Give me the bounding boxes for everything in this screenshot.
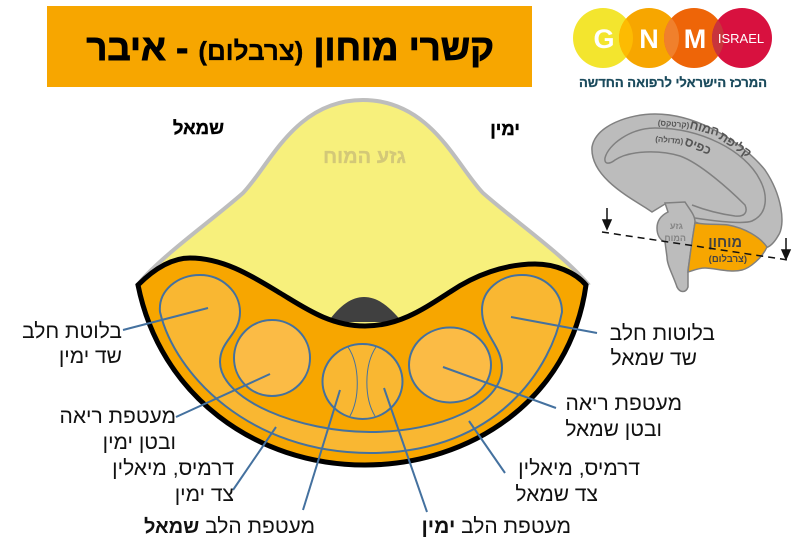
label: pericardium left: מעטפת הלב שמאל: [144, 515, 315, 538]
cerebellum label: מוחון: [708, 235, 742, 251]
label: dermis right: [112, 457, 234, 506]
label: left lung and belly pleura: ובטן שמאל: [565, 418, 662, 441]
cerebellum label: (צרבלום): [709, 254, 747, 265]
label: right mammary gland: שד ימין: [59, 345, 122, 368]
label: dermis right: דרמיס, מיאלין: [112, 457, 234, 480]
title banner: קשרי מוחון (צרבלום) - איבר: [86, 27, 494, 68]
inner band: [605, 128, 765, 222]
brainstem cross-section (yellow): [139, 100, 587, 330]
fourth ventricle (dark): [328, 297, 402, 322]
brainstem label: גזע: [670, 221, 684, 231]
corpus label: [655, 135, 713, 158]
right arrow: [782, 238, 790, 259]
side label: left: שמאל: [173, 117, 224, 138]
side label: right: ימין: [490, 118, 520, 139]
label: left lung and belly pleura: [565, 392, 682, 441]
brainstem cross-section (yellow): גזע המוח: [323, 146, 406, 168]
label: dermis right: צד ימין: [175, 483, 234, 506]
label: dermis left: צד שמאל: [515, 483, 598, 506]
pericardium: [322, 344, 402, 419]
label: dermis left: דרמיס, מיאלין: [518, 457, 640, 480]
left arrow: [603, 208, 611, 229]
logo: GNM Israel: N: [639, 24, 659, 54]
section line: [602, 232, 788, 260]
cortex label: (קרטקס): [657, 118, 690, 130]
logo: GNM Israel: M: [684, 24, 706, 54]
logo: GNM Israel: ISRAEL: [718, 31, 764, 46]
cortex label: המוח: [688, 118, 721, 139]
label: right lung and belly pleura: ובטן ימין: [103, 431, 176, 454]
left lung pleura: [234, 320, 310, 396]
corpus label: (מדולה): [655, 135, 684, 146]
label: right lung and belly pleura: [60, 405, 176, 454]
cortex and white matter: [592, 114, 782, 248]
cerebellum: [688, 223, 767, 272]
leader lines: [123, 308, 597, 512]
title banner: [47, 6, 532, 87]
label: left mammary gland: שד שמאל: [611, 347, 697, 370]
cerebellum label: [708, 235, 747, 265]
label: left mammary gland: בלוטות חלב: [610, 322, 715, 345]
right lung pleura: [409, 328, 491, 402]
label: right lung and belly pleura: מעטפת ריאה: [60, 405, 176, 428]
brainstem label: [664, 221, 686, 243]
logo: GNM Israel: [573, 8, 772, 90]
brainstem: [657, 202, 695, 292]
cortex label: [657, 118, 754, 161]
logo: GNM Israel: G: [593, 24, 615, 54]
label: dermis left: [515, 457, 640, 506]
mammary glands and dermis band: [160, 275, 562, 453]
label: right mammary gland: בלוטת חלב: [22, 320, 122, 343]
brainstem label: המוח: [664, 233, 686, 243]
label: pericardium right: מעטפת הלב ימין: [421, 515, 571, 538]
cerebellum cross-section: [138, 258, 586, 465]
logo: GNM Israel: המרכז הישראלי לרפואה החדשה: [579, 75, 767, 90]
label: right mammary gland: [22, 320, 122, 368]
label: left lung and belly pleura: מעטפת ריאה: [566, 392, 682, 415]
cortex label: קליפת: [716, 129, 754, 161]
label: left mammary gland: [610, 322, 715, 370]
small brain diagram: [592, 114, 790, 292]
corpus label: כפיס: [683, 135, 713, 158]
